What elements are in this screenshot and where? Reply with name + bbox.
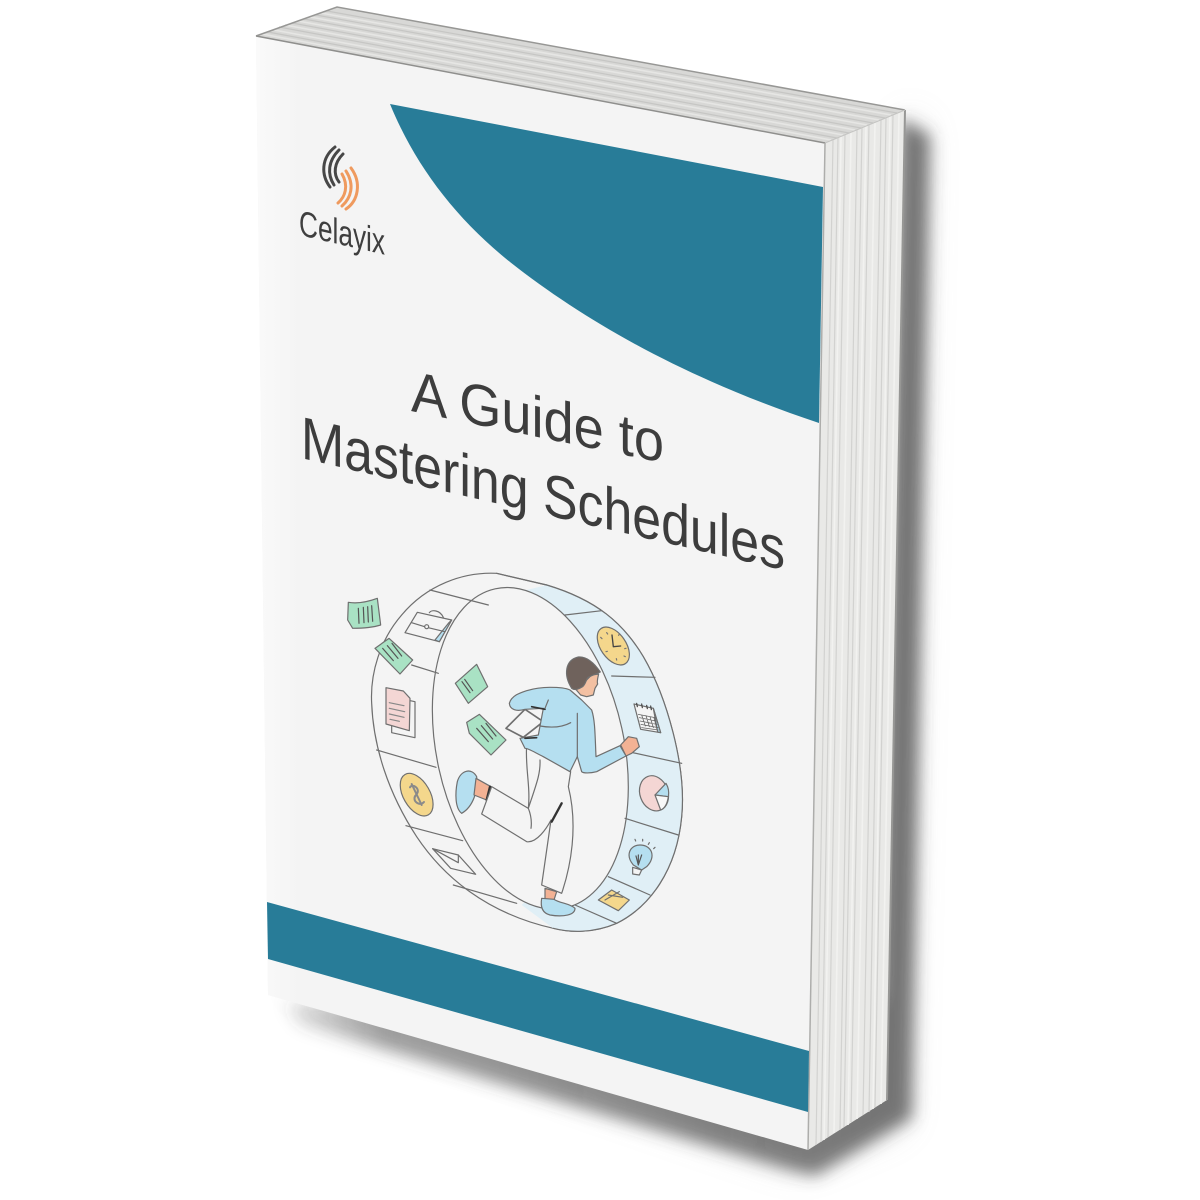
icon: light bulb [629, 839, 655, 875]
teal corner shape [390, 104, 823, 423]
front cover [256, 36, 825, 1150]
person [456, 657, 639, 916]
title [301, 360, 785, 583]
icon: flying paper 2 [375, 638, 413, 674]
illustration: person running in a wheel [348, 569, 682, 931]
hand [621, 737, 639, 756]
front shoe [541, 888, 575, 916]
drop shadow [265, 110, 930, 1176]
face [575, 674, 599, 697]
logo mark [324, 147, 357, 209]
icon: flying paper 1 [348, 598, 381, 628]
right page block [808, 110, 905, 1150]
notebook [506, 709, 543, 737]
wheel [371, 569, 682, 931]
icon: envelope [433, 849, 476, 874]
back shoe [456, 771, 491, 813]
logo [299, 147, 385, 263]
icon: calendar [634, 703, 661, 733]
teal bottom band [267, 902, 809, 1112]
trousers [482, 743, 573, 893]
logo wordmark: Celayix [299, 202, 385, 263]
title line 2: Mastering Schedules [301, 404, 785, 583]
icon: flying paper 4 [467, 714, 506, 755]
icon: briefcase [405, 611, 452, 642]
jacket [509, 687, 626, 773]
icon: folder [598, 890, 629, 911]
icon: flying paper 3 [455, 664, 488, 703]
icon: dollar coin [393, 768, 440, 822]
top page block [256, 7, 905, 143]
title line 1: A Guide to [411, 360, 664, 476]
icon: clock [591, 621, 636, 671]
hair [567, 657, 600, 690]
icon: document [386, 688, 415, 738]
icon: pie chart [635, 772, 673, 815]
